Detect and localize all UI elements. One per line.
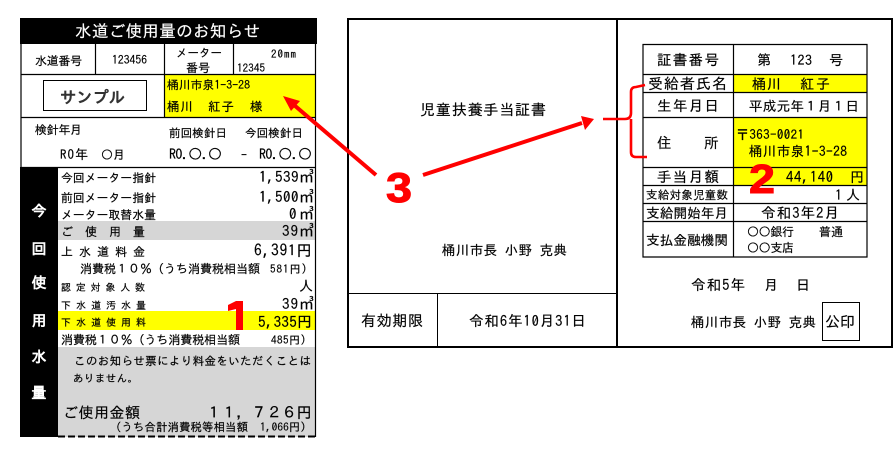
certificate table: 普通: [819, 225, 843, 238]
notice text: ありません。: [73, 373, 138, 384]
recipient address: 桶川市泉1-3-28: [167, 79, 250, 91]
meter reading dates: 前回検針日: [169, 126, 227, 139]
usage rows: 39㎥: [282, 223, 314, 238]
usage rows: 消費税１０％（うち消費税相当額: [61, 334, 240, 346]
bracket: name and address fields: [603, 85, 647, 157]
marker 3: 3: [386, 164, 412, 211]
certificate table: 支払金融機関: [646, 233, 728, 247]
meter reading dates: RO年: [60, 148, 88, 161]
sample stamp: [44, 80, 146, 110]
side label band: 用: [32, 313, 46, 328]
usage rows: 上 水 道 料 金: [61, 246, 145, 258]
usage rows: 1,539㎥: [259, 169, 314, 184]
usage rows: 0㎥: [289, 206, 314, 221]
side label band: 回: [32, 241, 46, 256]
mayor name right: 桶川市長 小野 克典: [691, 315, 816, 329]
usage rows: ご 使 用 量: [61, 225, 145, 238]
certificate table: 桶川: [752, 77, 781, 91]
certificate table: ○○銀行: [747, 226, 794, 238]
title band: 水道ご使用量のお知らせ: [75, 22, 260, 39]
arrow: to certificate bracket: [423, 116, 594, 175]
certificate table: 円: [850, 170, 864, 184]
usage rows: 39㎥: [282, 296, 314, 311]
recipient address: [167, 79, 263, 113]
usage rows: 5,335円: [258, 314, 312, 329]
mayor name left: 桶川市長 小野 克典: [442, 243, 567, 257]
side label band: [20, 167, 58, 437]
side label band: 使: [32, 275, 46, 290]
notice text: このお知らせ票により料金をいただくことは: [74, 355, 311, 367]
certificate table: 令和3年2月: [761, 205, 839, 220]
certificate table: 住: [657, 135, 672, 150]
highlight: sewer charge row: [58, 311, 315, 330]
meter reading dates: -: [241, 149, 247, 161]
meter reading dates: ○月: [101, 149, 125, 161]
certificate table: [643, 44, 867, 257]
usage rows: 前回メーター指針: [61, 191, 156, 204]
highlight: address: [164, 75, 315, 117]
header fields: 123456: [112, 55, 147, 66]
meter reading dates: [35, 123, 312, 161]
expiry: [361, 313, 586, 328]
header fields: メーター: [176, 47, 222, 59]
meter reading dates: RO.○.○: [259, 147, 312, 161]
header fields: 番号: [186, 62, 210, 74]
usage rows: メーター取替水量: [61, 209, 156, 221]
total amount: １１，７２６円: [206, 404, 312, 420]
meter reading dates: 検針年月: [35, 123, 82, 136]
issue date: 日: [796, 278, 810, 292]
certificate table: 受給者氏名: [648, 76, 727, 91]
header fields: 12345: [237, 63, 265, 74]
usage rows: 1,500㎥: [259, 189, 314, 204]
recipient address: 紅子: [208, 100, 234, 113]
certificate table: 第: [757, 53, 771, 67]
marker 2: 2: [749, 156, 775, 202]
header fields: 20mm: [271, 49, 296, 60]
header fields: 水道番号: [35, 55, 82, 67]
highlight: usage amount row: [58, 221, 315, 240]
issue date: [691, 277, 810, 292]
certificate table: 号: [829, 53, 843, 67]
total amount: [63, 404, 312, 433]
usage rows: 消費税１０％（うち消費税相当額: [80, 263, 260, 275]
certificate table: 手当月額: [657, 169, 719, 184]
usage rows: 認 定 対 象 人 数: [61, 282, 145, 293]
official seal: [822, 302, 860, 340]
usage rows: [61, 169, 314, 346]
side label band: 今: [32, 203, 46, 218]
total amount: （うち合計消費税等相当額: [110, 421, 248, 433]
title band: [20, 18, 317, 44]
total amount: 1,066円): [260, 422, 306, 433]
meter reading dates: 今回検針日: [245, 126, 303, 139]
certificate table: 支給対象児童数: [646, 188, 728, 201]
meter reading dates: RO.○.○: [169, 147, 222, 161]
certificate table: 1 人: [835, 188, 860, 202]
marker 1: [228, 301, 243, 330]
certificate table: 支給開始年月: [646, 206, 728, 220]
sample stamp: サンプル: [60, 89, 125, 105]
side label band: 水: [32, 349, 46, 364]
usage rows: 581円): [270, 264, 307, 275]
side label band: 量: [32, 385, 46, 400]
total amount: ご使用金額: [63, 405, 140, 420]
certificate table: 44,140: [786, 169, 833, 184]
certificate table: 紅子: [800, 77, 830, 91]
panel: water usage notice: [20, 18, 317, 437]
grey notice area: [58, 347, 315, 437]
recipient address: 様: [250, 100, 263, 113]
certificate title: 児童扶養手当証書: [420, 102, 546, 117]
arrow: to address on notice: [283, 96, 376, 175]
issue date: 令和5年: [691, 277, 745, 292]
usage rows: 人: [299, 279, 313, 293]
certificate table: 123: [790, 53, 812, 67]
certificate table: 証書番号: [657, 52, 719, 67]
usage rows: 今回メーター指針: [61, 171, 156, 184]
header fields: [35, 47, 296, 74]
certificate table: 桶川市泉1-3-28: [749, 144, 847, 158]
certificate table: 生年月日: [657, 98, 719, 113]
certificate table: ○○支店: [747, 242, 794, 254]
panel: child allowance certificate: [347, 18, 892, 347]
certificate table: 平成元年１月１日: [749, 99, 859, 113]
recipient address: 桶川: [167, 100, 193, 113]
expiry: 令和6年10月31日: [469, 313, 586, 328]
certificate table: 〒363-0021: [736, 128, 804, 141]
usage rows: 下 水 道 使 用 料: [61, 317, 146, 328]
usage rows: 下 水 道 汚 水 量: [61, 300, 146, 311]
issue date: 月: [764, 278, 778, 292]
official seal: 公印: [825, 314, 855, 329]
usage rows: 6,391円: [254, 242, 312, 258]
certificate table: 所: [704, 135, 718, 150]
usage rows: 485円): [271, 335, 306, 346]
expiry: 有効期限: [361, 313, 423, 328]
notice text: [73, 355, 311, 384]
